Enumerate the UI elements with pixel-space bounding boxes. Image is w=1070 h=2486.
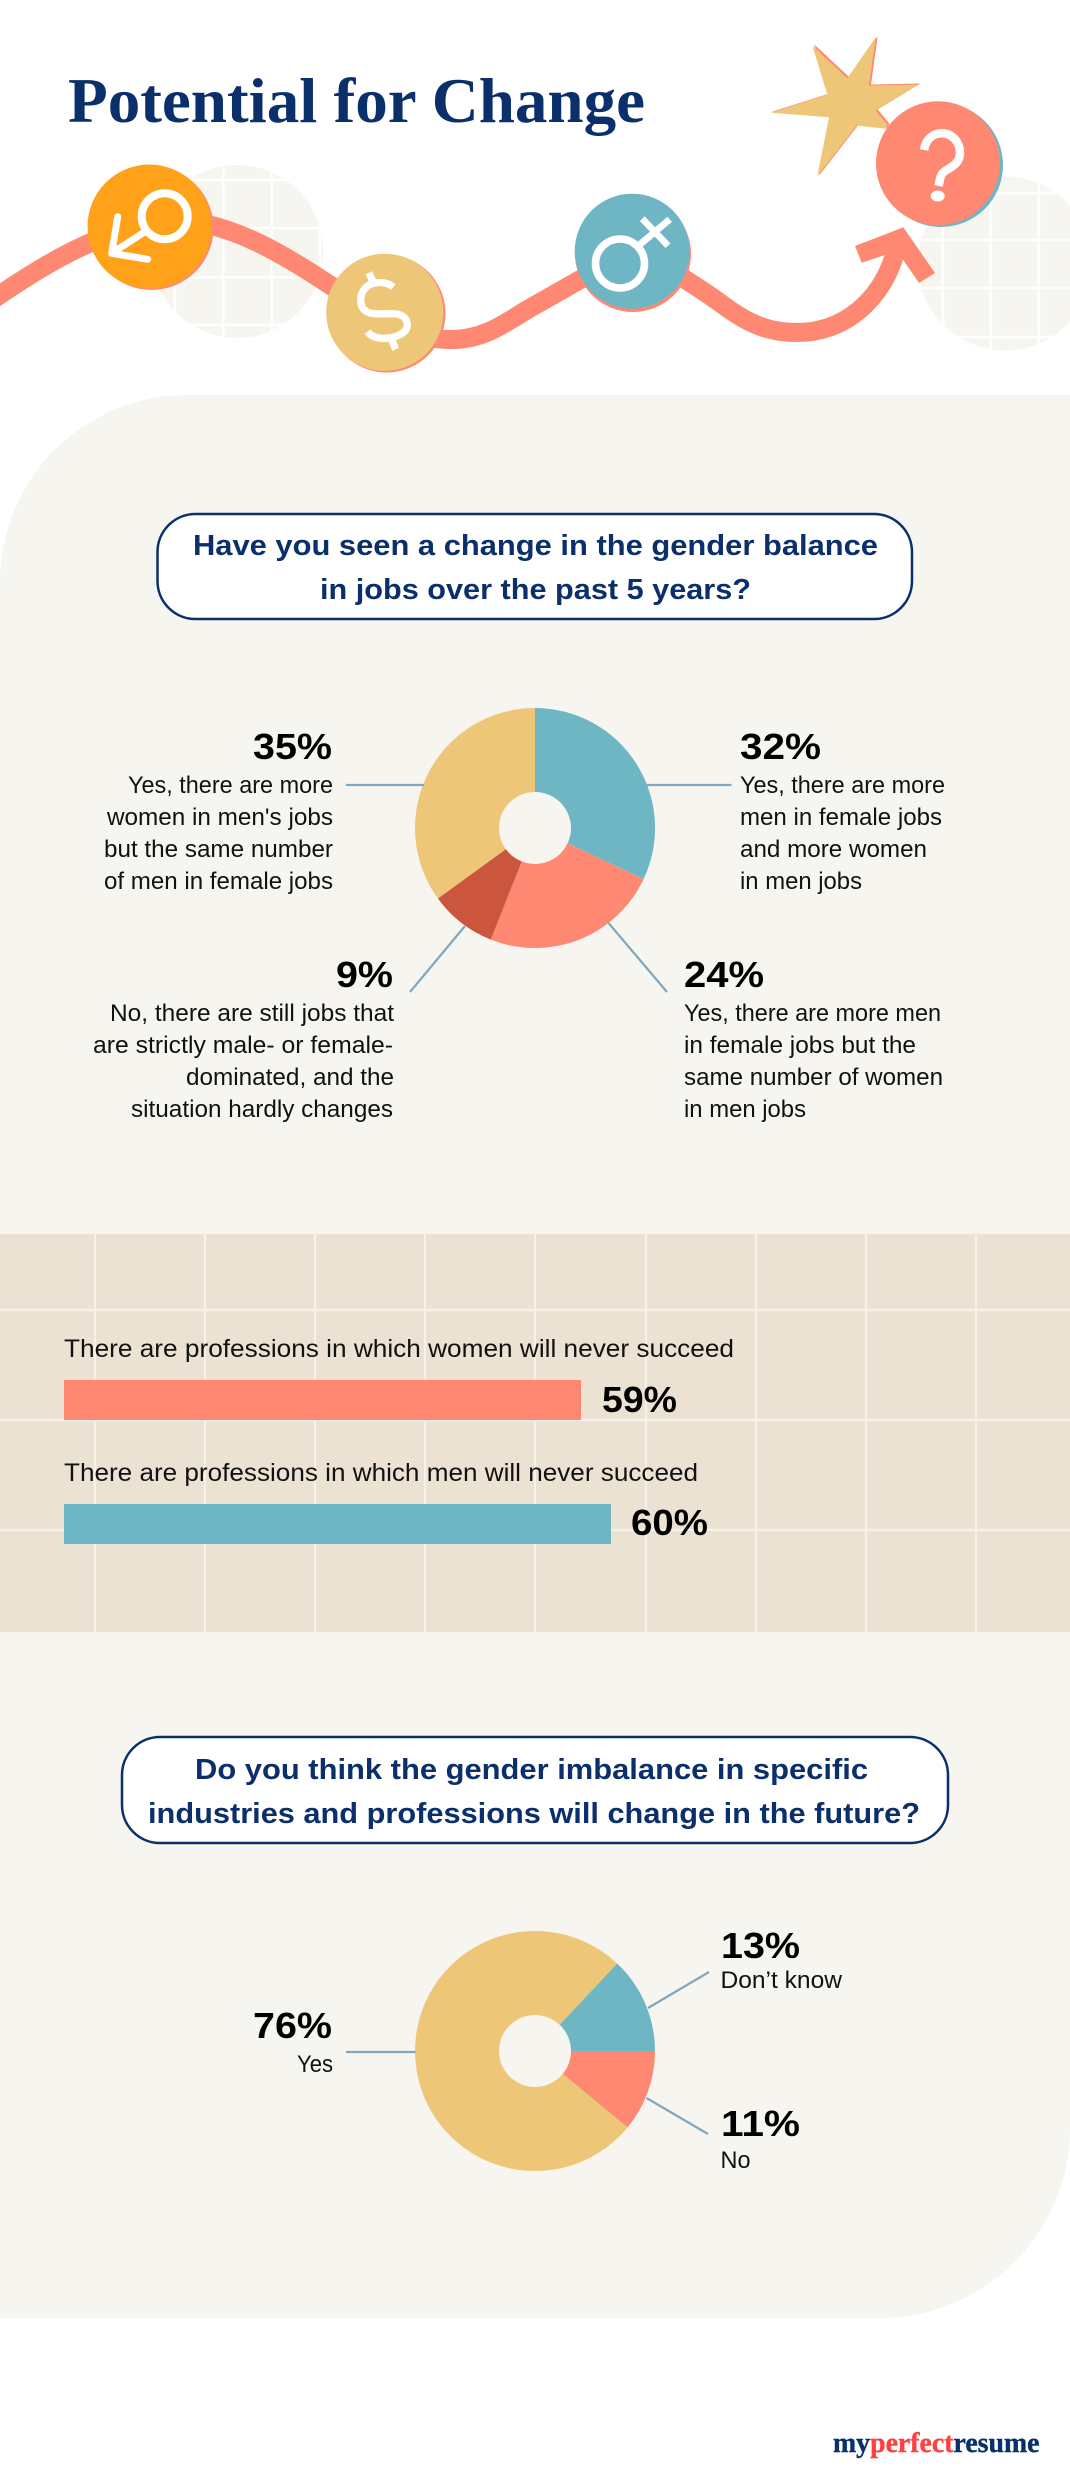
bar: women: There are professions in which women will never succeed bbox=[64, 1335, 734, 1363]
title: Potential for Change bbox=[68, 65, 645, 136]
logo: myperfectresume bbox=[833, 2427, 1040, 2459]
grid circle right bbox=[919, 176, 1070, 350]
callout: 76% yes: 76% bbox=[253, 2005, 332, 2046]
callout: 11% no bbox=[646, 2098, 800, 2174]
callout: 32%: in men jobs bbox=[740, 868, 862, 895]
icon: male symbol coin bbox=[88, 164, 214, 290]
callout: 35%: women in men's jobs bbox=[106, 804, 333, 831]
donut chart: future change bbox=[415, 1931, 655, 2171]
grid circle left bbox=[160, 165, 324, 338]
question box: future change: Do you think the gender imbalance in specific bbox=[195, 1754, 868, 1786]
callout: 24% bbox=[608, 923, 943, 1123]
question box: gender balance change: Have you seen a change in the gender balance bbox=[193, 530, 878, 562]
callout: 9% bbox=[93, 926, 465, 1123]
callout: 35%: Yes, there are more bbox=[128, 772, 333, 799]
callout: 35%: 35% bbox=[253, 726, 332, 767]
callout: 13% don't know bbox=[648, 1925, 843, 2008]
star bbox=[771, 36, 920, 176]
callout: 35%: of men in female jobs bbox=[104, 868, 333, 895]
donut chart: change in balance bbox=[415, 708, 655, 948]
callout: 9%: dominated, and the bbox=[186, 1064, 394, 1091]
callout: 13% don't know: 13% bbox=[721, 1925, 800, 1966]
icon: female symbol coin bbox=[575, 194, 691, 312]
header illustration bbox=[0, 36, 1070, 372]
question box: future change bbox=[122, 1737, 948, 1843]
callout: 11% no: No bbox=[720, 2147, 750, 2174]
callout: 32% bbox=[647, 726, 945, 895]
callout: 11% no: 11% bbox=[721, 2103, 800, 2144]
callout: 24%: 24% bbox=[684, 954, 764, 995]
callout: 24%: Yes, there are more men bbox=[684, 1000, 941, 1027]
question box: gender balance change: in jobs over the past 5 years? bbox=[320, 574, 751, 606]
bar: women bbox=[64, 1335, 734, 1420]
question box: gender balance change bbox=[158, 514, 912, 619]
callout: 9%: 9% bbox=[336, 954, 393, 995]
callout: 9%: are strictly male- or female- bbox=[93, 1032, 393, 1059]
icon: dollar coin bbox=[326, 254, 446, 372]
bar: men bbox=[64, 1459, 708, 1544]
callout: 32%: 32% bbox=[740, 726, 821, 767]
wavy arrow line bbox=[0, 220, 894, 340]
arrow head bbox=[855, 227, 935, 283]
callout: 24%: in men jobs bbox=[684, 1096, 806, 1123]
callout: 32%: and more women bbox=[740, 836, 927, 863]
callout: 76% yes: Yes bbox=[297, 2051, 333, 2078]
panel: bar band bbox=[0, 1231, 1070, 1632]
callout: 13% don't know: Don’t know bbox=[720, 1967, 843, 1994]
callout: 24%: in female jobs but the bbox=[684, 1032, 916, 1059]
icon: question mark coin bbox=[876, 101, 1003, 227]
question box: future change: industries and professions will change in the future? bbox=[148, 1798, 920, 1830]
bar: women: 59% bbox=[602, 1379, 677, 1420]
callout: 9%: No, there are still jobs that bbox=[110, 1000, 394, 1027]
callout: 32%: Yes, there are more bbox=[740, 772, 945, 799]
callout: 9%: situation hardly changes bbox=[131, 1096, 393, 1123]
callout: 35%: but the same number bbox=[104, 836, 333, 863]
callout: 24%: same number of women bbox=[684, 1064, 943, 1091]
bar: men: 60% bbox=[631, 1502, 708, 1543]
callout: 32%: men in female jobs bbox=[740, 804, 942, 831]
callout: 35% bbox=[104, 726, 424, 895]
callout: 76% yes bbox=[253, 2005, 416, 2078]
panel: main background bbox=[0, 395, 1070, 2318]
bar: men: There are professions in which men will never succeed bbox=[64, 1459, 698, 1487]
